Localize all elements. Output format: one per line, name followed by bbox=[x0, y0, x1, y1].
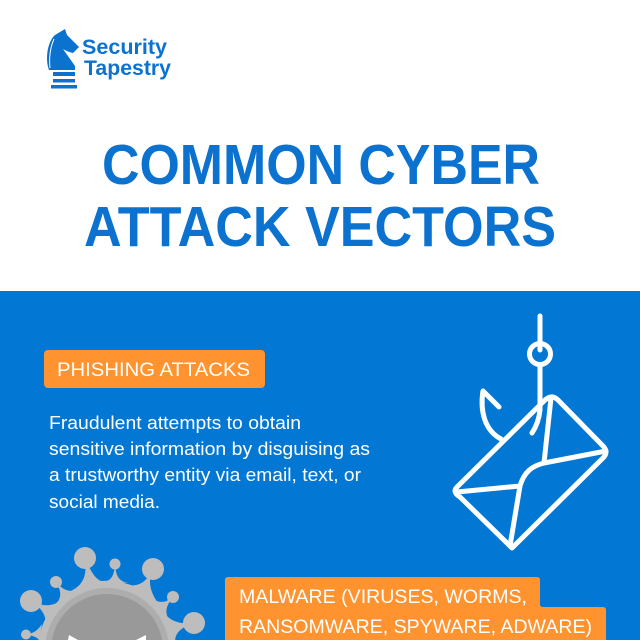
icon: chess knight bbox=[47, 29, 79, 88]
envelope flap bbox=[457, 451, 606, 492]
logo wordmark line 2: Tapestry bbox=[84, 57, 171, 80]
logo wordmark line 1: Security bbox=[82, 36, 167, 59]
text block: phishing description: a trustworthy entity via email, text, or bbox=[49, 465, 361, 485]
panel: white header background bbox=[0, 0, 640, 291]
virus spikes bbox=[20, 547, 205, 640]
envelope outline bbox=[455, 397, 606, 548]
hook bbox=[532, 365, 540, 433]
hook eye bbox=[530, 344, 550, 364]
badge: phishing attacks bbox=[44, 350, 265, 388]
title line 1: COMMON CYBER bbox=[102, 133, 540, 197]
badge: malware: MALWARE (VIRUSES, WORMS, bbox=[239, 587, 527, 608]
fishing line bbox=[538, 316, 542, 350]
title line 2: ATTACK VECTORS bbox=[84, 195, 556, 259]
text block: phishing description: sensitive information by disguising as bbox=[49, 439, 370, 459]
text block: phishing description: social media. bbox=[49, 492, 160, 512]
badge: malware: RANSOMWARE, SPYWARE, ADWARE) bbox=[239, 617, 592, 638]
virus body bbox=[39, 581, 175, 640]
text block: phishing description: Fraudulent attempts to obtain bbox=[49, 413, 301, 433]
logo: Security Tapestry bbox=[47, 29, 171, 88]
title bbox=[84, 133, 556, 259]
badge: malware bbox=[225, 577, 606, 640]
text block: phishing description bbox=[49, 413, 370, 512]
panel: blue content background bbox=[0, 291, 640, 640]
icon: envelope on fishing hook bbox=[455, 316, 606, 548]
virus face marks bbox=[68, 635, 78, 640]
icon: virus bbox=[20, 547, 205, 640]
badge: phishing attacks: PHISHING ATTACKS bbox=[57, 360, 250, 381]
